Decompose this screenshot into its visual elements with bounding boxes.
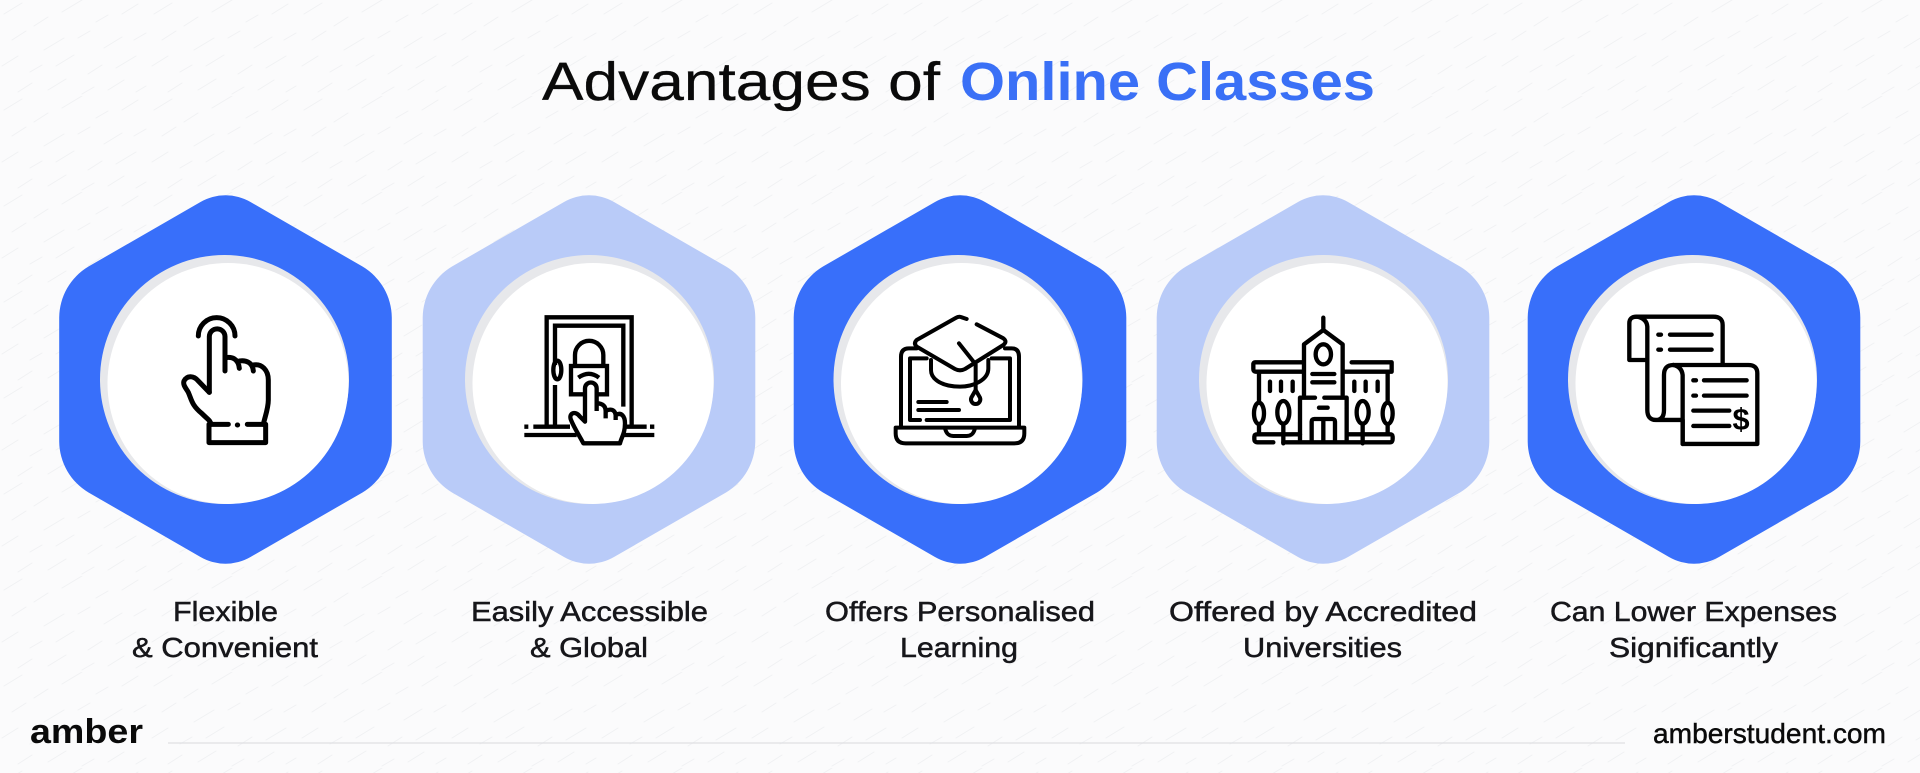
circle 1 bbox=[100, 255, 349, 504]
icon: bills with dollar sign: $ bbox=[1732, 402, 1750, 436]
label 1: & Convenient bbox=[132, 632, 318, 663]
icon: pointing hand bbox=[184, 318, 268, 443]
label 1 bbox=[132, 596, 318, 663]
label 2: & Global bbox=[530, 632, 648, 663]
label 2: Easily Accessible bbox=[471, 596, 708, 627]
circle 2 bbox=[465, 255, 714, 504]
panel: personalised learning bbox=[794, 195, 1126, 663]
label 5: Significantly bbox=[1609, 632, 1778, 663]
panel: accredited universities bbox=[1157, 195, 1489, 663]
footer brand logo: amber bbox=[30, 713, 143, 751]
label 4: Offered by Accredited bbox=[1169, 596, 1477, 627]
hexagon 1 bbox=[59, 195, 392, 564]
label 3 bbox=[825, 596, 1095, 663]
label 3: Offers Personalised bbox=[825, 596, 1095, 627]
hexagon 3 bbox=[794, 195, 1126, 564]
circle 4 bbox=[1199, 255, 1448, 504]
label 5 bbox=[1550, 596, 1837, 663]
circle 5 bbox=[1568, 255, 1817, 504]
title: Advantages of bbox=[542, 52, 941, 112]
circle 3 bbox=[834, 255, 1082, 504]
icon: door lock with hand bbox=[524, 317, 654, 443]
panel: easily accessible and global bbox=[423, 195, 755, 663]
icon: university building bbox=[1253, 318, 1393, 443]
hexagon 4 bbox=[1157, 195, 1489, 564]
icon: bills with dollar sign bbox=[1629, 317, 1757, 444]
title bbox=[542, 52, 1375, 112]
label 5: Can Lower Expenses bbox=[1550, 596, 1837, 627]
hexagon 5 bbox=[1528, 195, 1860, 564]
panel: lower expenses bbox=[1528, 195, 1860, 663]
label 2 bbox=[471, 596, 708, 663]
icon: laptop with graduation cap bbox=[896, 317, 1024, 443]
hexagon 2 bbox=[423, 195, 755, 564]
panel: flexible and convenient bbox=[59, 195, 392, 663]
footer website: amberstudent.com bbox=[1653, 718, 1886, 749]
label 4: Universities bbox=[1243, 632, 1402, 663]
label 3: Learning bbox=[900, 632, 1018, 663]
title: Online Classes bbox=[960, 52, 1375, 112]
label 1: Flexible bbox=[173, 596, 278, 627]
label 4 bbox=[1169, 596, 1477, 663]
